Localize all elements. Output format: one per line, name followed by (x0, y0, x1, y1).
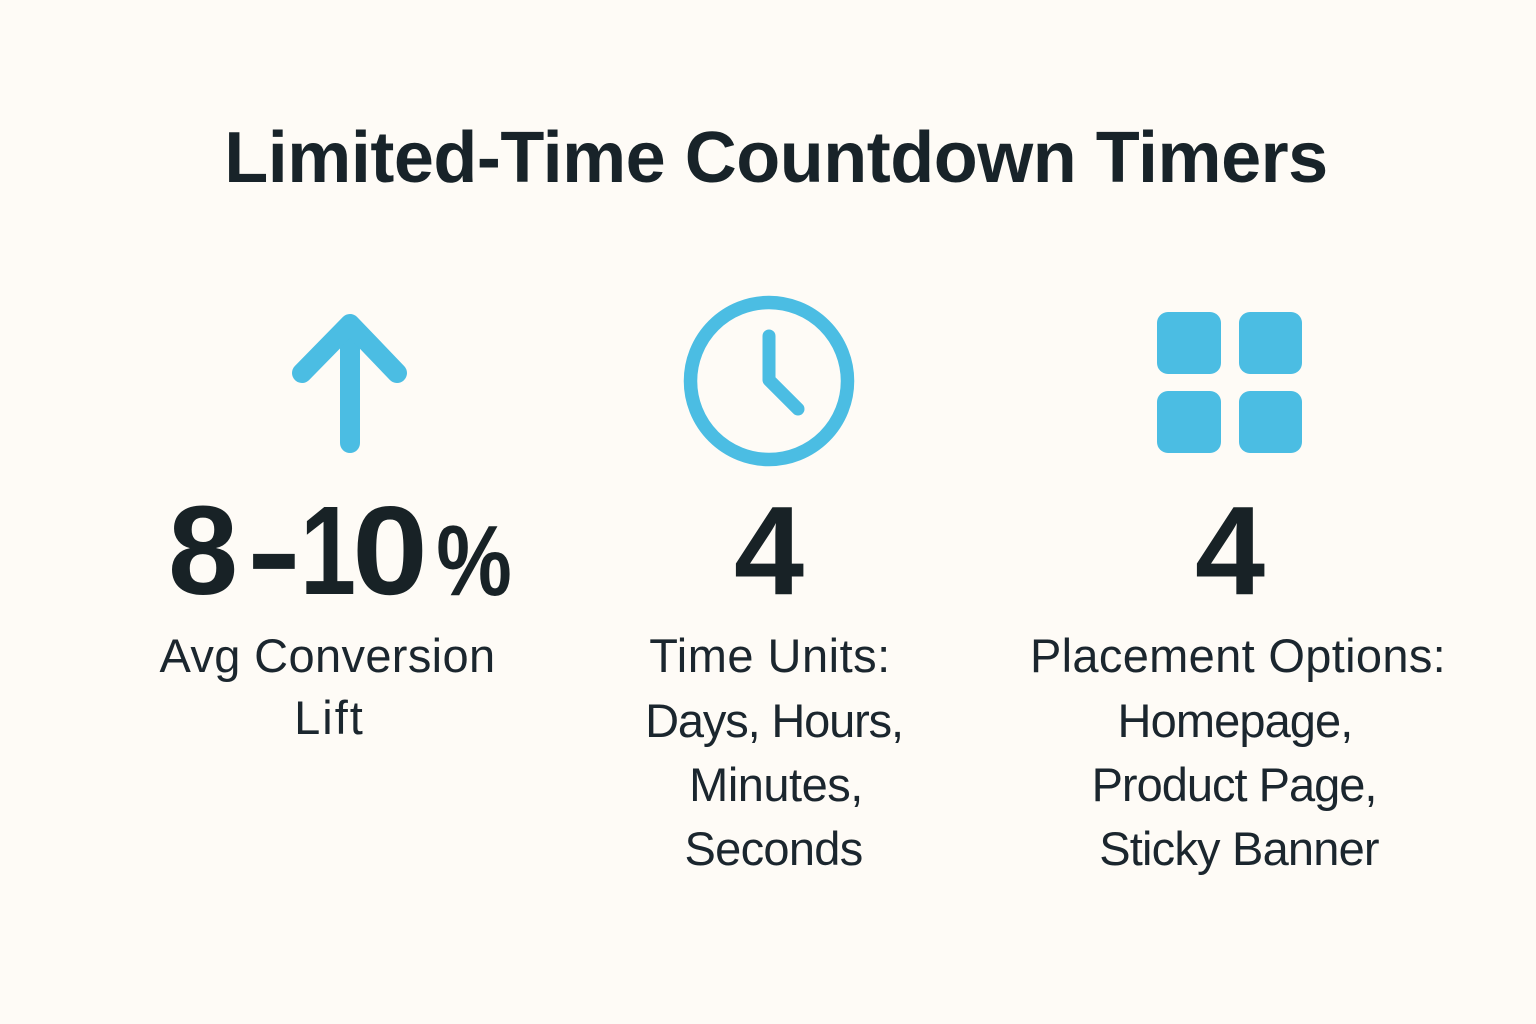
label: time units: Time Units: (649, 629, 891, 682)
label: time units: Days, Hours, (645, 694, 903, 747)
stat: 4: 4 (1195, 480, 1265, 621)
label: time units: Seconds (684, 822, 863, 875)
icon: up arrow (292, 314, 407, 453)
label: placement options: Sticky Banner (1099, 822, 1379, 875)
label: placement options: Product Page, (1092, 758, 1376, 811)
icon: four squares grid (1157, 312, 1302, 453)
label: avg conversion lift: Avg Conversion (160, 629, 495, 682)
label: placement options (1030, 629, 1446, 875)
label: avg conversion lift: Lift (294, 691, 365, 744)
stat: 8-10%: % (436, 505, 511, 617)
panel: conversion lift (160, 314, 511, 744)
label: placement options: Placement Options: (1030, 629, 1446, 682)
label: placement options: Homepage, (1118, 694, 1352, 747)
stat: 8-10%: - (246, 480, 301, 621)
stat: 8-10% (168, 480, 511, 621)
label: avg conversion lift (160, 629, 495, 744)
icon: clock (684, 296, 854, 466)
panel: time units (645, 296, 903, 875)
stat: 8-10%: 0 (352, 480, 428, 621)
title: Limited-Time Countdown Timers (224, 118, 1328, 198)
label: time units (645, 629, 903, 875)
stat: 8-10%: 1 (300, 480, 356, 621)
stat: 8-10%: 8 (168, 480, 238, 621)
label: time units: Minutes, (689, 758, 863, 811)
stat: 4: 4 (734, 480, 804, 621)
panel: placement options (1030, 312, 1446, 875)
